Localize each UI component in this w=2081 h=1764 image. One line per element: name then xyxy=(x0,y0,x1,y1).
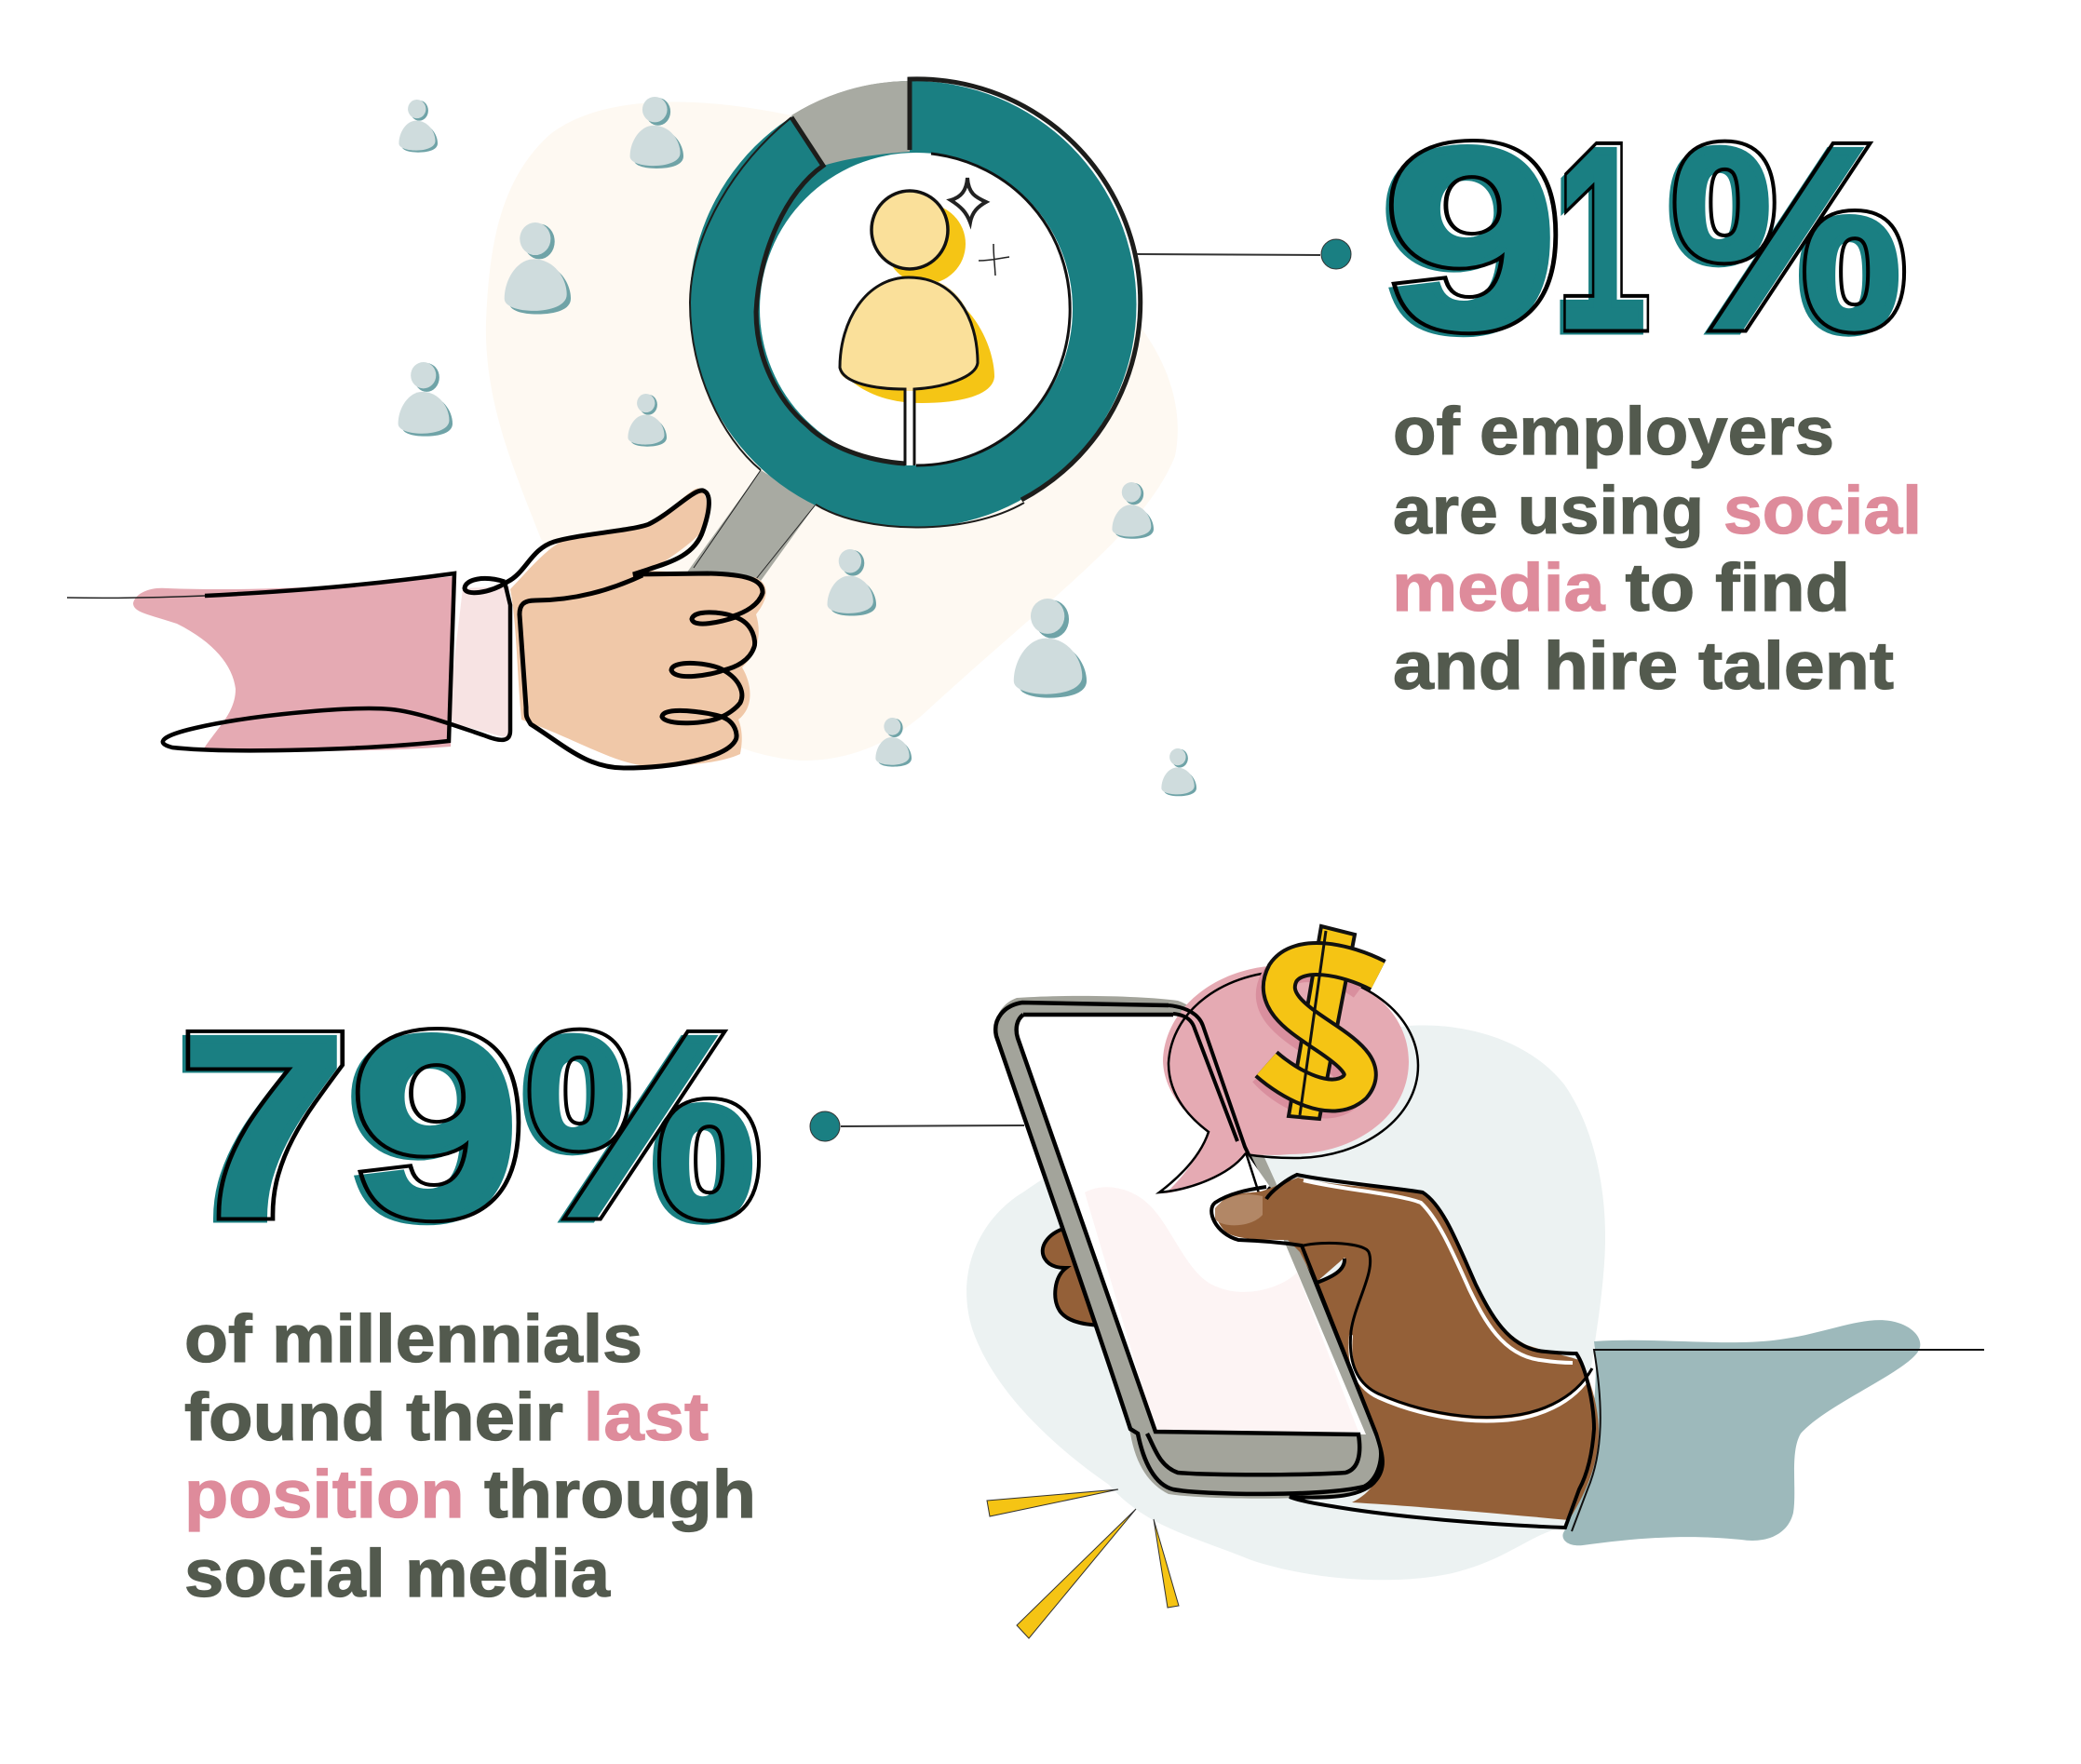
sleeve: pink xyxy=(133,576,454,751)
person in lens xyxy=(840,191,994,465)
stat: 91%: 1 xyxy=(1557,92,1650,383)
hand fill xyxy=(510,488,766,766)
stat: 91%: 9 xyxy=(1380,96,1557,386)
text block: employers: of employers xyxy=(1393,395,1834,469)
connector line and dot: 79 percent xyxy=(810,1111,1024,1141)
magnifying glass xyxy=(686,79,1141,581)
text block: employers: and hire talent xyxy=(1393,629,1894,704)
text block: employers: are using social xyxy=(1393,474,1922,548)
phone outline xyxy=(995,1003,1381,1494)
connector line and dot: 91 percent xyxy=(1137,239,1351,269)
icon: small sparkle xyxy=(979,244,1009,276)
text block: millennials: found their last xyxy=(184,1380,709,1455)
stat: 91%: 9 xyxy=(1385,92,1562,383)
hand outline xyxy=(1211,1175,1594,1528)
phone body xyxy=(994,996,1384,1499)
background blob: cream xyxy=(486,102,1178,761)
stat: 91%: % xyxy=(1667,96,1901,386)
sleeve line xyxy=(1572,1350,1984,1531)
hand holding magnifier xyxy=(67,488,766,768)
speech bubble xyxy=(1159,965,1418,1199)
stat: 91%: 1 xyxy=(1552,96,1645,386)
text block: millennials: position through xyxy=(184,1458,756,1532)
background blob: pale blue-grey xyxy=(966,1025,1605,1580)
hand fill brown xyxy=(1216,1178,1599,1520)
burst rays: yellow xyxy=(987,1489,1179,1638)
bubble outline xyxy=(1159,971,1418,1192)
hand outline xyxy=(465,491,763,768)
icon: dollar sign xyxy=(1264,926,1378,1119)
phone screen xyxy=(1018,1013,1366,1434)
icon: small people scattered xyxy=(399,97,1196,796)
text block: employers xyxy=(1392,395,1922,704)
arm sleeve: blue-grey xyxy=(1562,1320,1920,1545)
magnifier handle xyxy=(686,470,816,581)
stat: 79%: % xyxy=(527,980,762,1271)
stat: 79%: 7 xyxy=(180,980,351,1271)
cuff xyxy=(447,586,511,739)
stat: 79%: 7 xyxy=(174,984,345,1274)
phone edge over bubble xyxy=(1169,1005,1266,1192)
sleeve outline xyxy=(163,573,510,750)
stat: 91% xyxy=(1385,139,1907,337)
icon: large sparkle xyxy=(951,178,986,222)
phone screen tint xyxy=(1085,1187,1358,1432)
stat: 91%: % xyxy=(1672,92,1907,383)
text block: employers: media to find xyxy=(1392,551,1850,626)
sleeve cuff line thin xyxy=(67,596,205,598)
stat: 79%: 9 xyxy=(352,980,525,1271)
phone xyxy=(994,996,1384,1499)
bubble fill xyxy=(1163,965,1409,1193)
text block: millennials: social media xyxy=(184,1537,611,1611)
stat: 79%: % xyxy=(520,984,755,1274)
fingers behind phone xyxy=(1043,1228,1108,1326)
hand holding phone xyxy=(1211,1175,1599,1528)
donut ring 91 percent xyxy=(689,79,1141,528)
text block: millennials: of millennials xyxy=(184,1302,642,1377)
hand highlight xyxy=(1304,1180,1592,1421)
stat: 79%: 9 xyxy=(345,984,519,1274)
stat: 79% xyxy=(182,1027,762,1225)
text block: millennials xyxy=(184,1302,756,1611)
thumbnail xyxy=(1215,1194,1263,1225)
